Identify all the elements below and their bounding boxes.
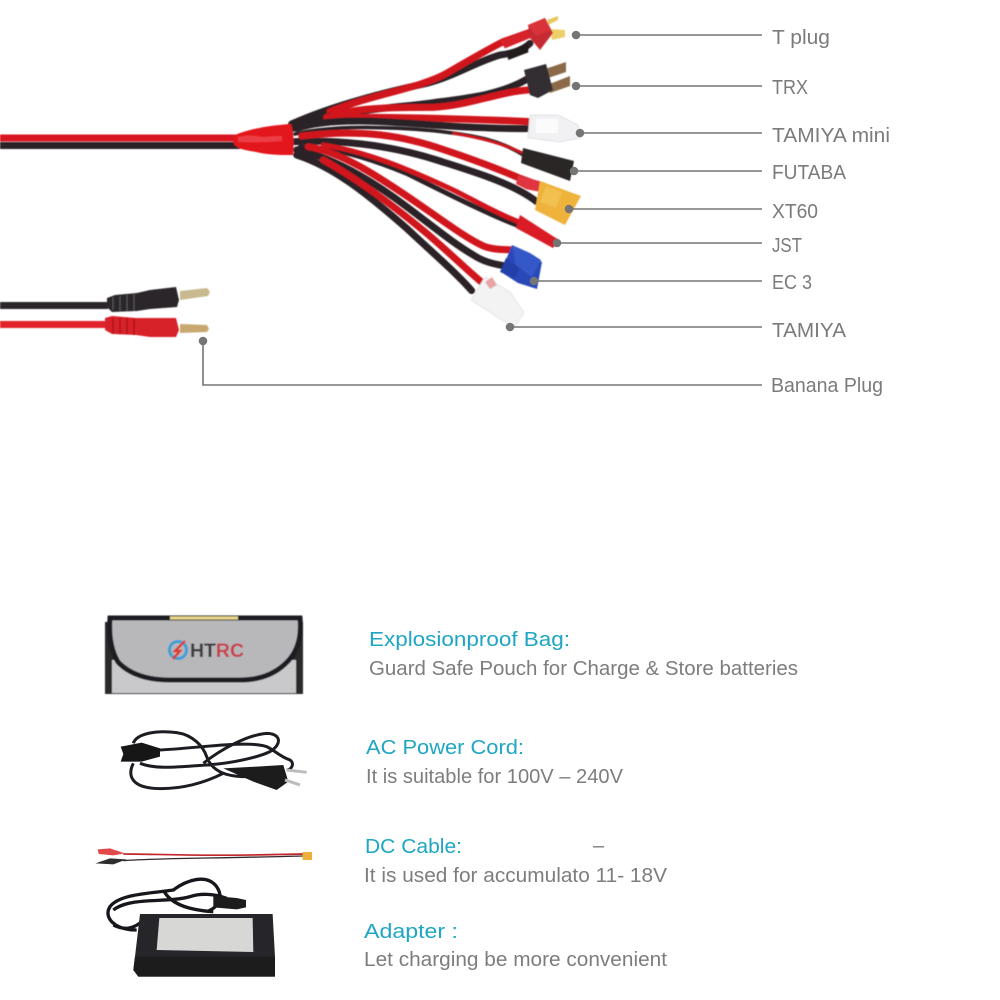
banana plugs: [0, 287, 210, 337]
bag flap: [110, 618, 300, 680]
image: power adapter: [108, 879, 275, 977]
text: adapter description: Let charging be more convenient: [364, 949, 667, 971]
connector: FUTABA: [521, 148, 574, 181]
heat shrink sleeves: [500, 29, 532, 48]
heading: DC Cable: DC Cable:: [365, 836, 462, 858]
fan-out wires: [292, 29, 545, 291]
leader lines and dots: [200, 32, 762, 385]
red hub sleeve: [233, 124, 294, 155]
image: AC power cord: [121, 732, 307, 790]
label: EC 3: EC 3: [772, 272, 812, 294]
text: DC cable description: It is used for accumulato 11- 18V: [364, 865, 668, 887]
text: power cord description: It is suitable for 100V – 240V: [366, 766, 624, 788]
heading: AC Power Cord: AC Power Cord:: [366, 737, 524, 759]
connector: T plug: [528, 16, 565, 50]
main charge cable with connector fan-out: [0, 16, 581, 326]
label: JST: JST: [772, 235, 802, 257]
label: T plug: T plug: [772, 27, 830, 49]
red banana plug: [0, 316, 209, 337]
connector: TAMIYA mini: [528, 115, 580, 142]
label: TRX: TRX: [772, 77, 808, 99]
red clip: [98, 848, 125, 855]
heading: Explosionproof Bag: Explosionproof Bag:: [369, 629, 570, 651]
black banana plug: [0, 287, 210, 312]
label: Banana Plug: Banana Plug: [771, 375, 883, 397]
label: XT60: XT60: [772, 201, 818, 223]
connector: TRX: [524, 62, 570, 98]
connector: XT60: [535, 181, 581, 225]
label: TAMIYA mini: TAMIYA mini: [772, 125, 890, 147]
adapter label: [157, 918, 253, 952]
black clip: [95, 858, 127, 864]
input wires: [0, 134, 240, 149]
C5 plug: [121, 743, 160, 762]
connector labels: [771, 27, 890, 397]
image: explosionproof bag: [105, 616, 303, 694]
dash mark: –: [593, 835, 605, 857]
section: accessory descriptions: [364, 629, 798, 971]
connector: EC3: [500, 245, 542, 289]
XT60 plug: [303, 852, 312, 860]
connector: JST: [516, 215, 559, 248]
label: FUTABA: FUTABA: [772, 162, 847, 184]
heading: Adapter: Adapter :: [364, 921, 458, 943]
adapter body: [133, 914, 275, 977]
text: bag description: Guard Safe Pouch for Charge & Store batteries: [369, 658, 798, 680]
image: DC cable with clips: [95, 848, 312, 864]
label: TAMIYA: TAMIYA: [772, 320, 847, 342]
connector: TAMIYA: [471, 277, 524, 326]
mains plug: [223, 765, 307, 790]
logo: HTRC: [190, 641, 244, 662]
